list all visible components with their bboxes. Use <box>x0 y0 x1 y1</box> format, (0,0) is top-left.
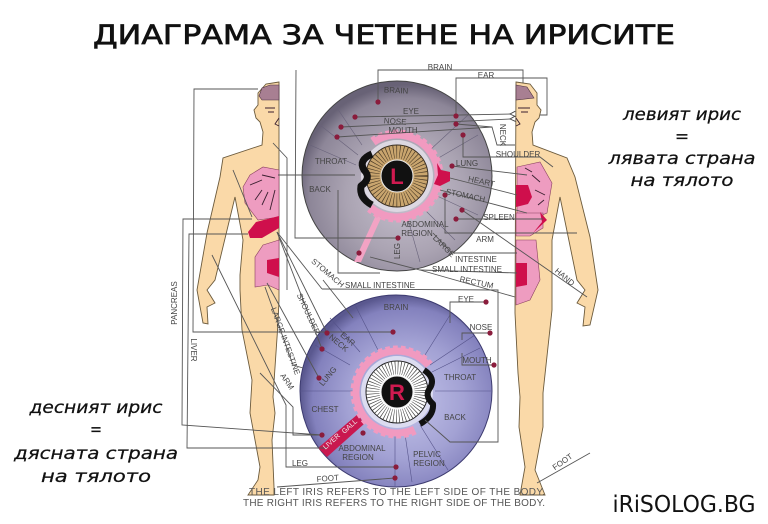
lower labels: SHOULDER <box>295 292 322 336</box>
lower labels: THROAT <box>444 373 476 382</box>
letter R: R <box>389 380 405 405</box>
upper labels: NECK <box>498 124 507 147</box>
callout: right iris <box>13 398 178 487</box>
lower labels: LARGE INTESTINE <box>269 306 302 376</box>
lower labels: REGION <box>413 459 445 468</box>
upper labels <box>309 63 576 291</box>
left lung <box>243 167 279 220</box>
black blob <box>420 370 433 424</box>
left intestines <box>255 240 279 290</box>
upper labels: EYE <box>403 107 419 116</box>
upper labels: ARM <box>476 235 494 244</box>
upper labels: LARGE <box>431 233 457 259</box>
upper labels: STOMACH <box>309 257 346 289</box>
callout: right iris: = <box>90 420 102 440</box>
upper labels: BRAIN <box>428 63 452 72</box>
right face <box>516 108 530 126</box>
connector lines <box>182 70 590 487</box>
lower labels: EYE <box>458 295 474 304</box>
callout: left iris: на тялото <box>630 171 734 191</box>
upper labels: BRAIN <box>384 85 409 96</box>
left small intestine <box>267 258 279 277</box>
upper labels: SHOULDER <box>496 150 540 159</box>
lower labels: NOSE <box>470 323 492 332</box>
lower labels: LEG <box>292 459 308 468</box>
right lung <box>517 162 552 220</box>
lower labels <box>170 281 574 484</box>
title: ДИАГРАМА ЗА ЧЕТЕНЕ НА ИРИСИТЕ <box>93 20 675 51</box>
upper labels: STOMACH <box>445 187 486 204</box>
lower labels: LIVER <box>322 433 342 451</box>
lower labels: FOOT <box>551 452 574 472</box>
upper iris <box>302 81 492 271</box>
right stomach <box>516 213 543 236</box>
upper labels: LUNG <box>456 159 478 168</box>
right spleen <box>533 212 547 233</box>
lower labels: ARM <box>278 372 296 392</box>
lower labels: FOOT <box>316 473 339 484</box>
right small intestine <box>516 263 527 287</box>
upper labels: INTESTINE <box>455 255 497 264</box>
right brain <box>516 85 534 100</box>
left brain <box>259 85 279 100</box>
red wedge <box>318 414 364 457</box>
lower labels: CHEST <box>311 405 339 414</box>
callout: right iris: десният ирис <box>28 398 163 418</box>
lower iris <box>300 295 492 487</box>
caption line 1: THE LEFT IRIS REFERS TO THE LEFT SIDE OF THE BODY. <box>249 487 545 498</box>
upper labels: SMALL INTESTINE <box>345 281 415 290</box>
caption line 2: THE RIGHT IRIS REFERS TO THE RIGHT SIDE OF THE BODY. <box>243 498 545 509</box>
brand: iRiSOLOG.BG <box>612 492 756 518</box>
lower labels: LIVER <box>189 338 198 362</box>
black blob <box>361 154 372 205</box>
upper labels: LEG <box>393 243 402 259</box>
callout: left iris: лявата страна <box>607 149 756 169</box>
upper labels: RECTUM <box>459 275 495 291</box>
upper labels: NOSE <box>384 116 407 127</box>
lower labels: GALL <box>341 418 359 435</box>
lower labels: BRAIN <box>384 303 408 312</box>
lower labels: PANCREAS <box>170 281 179 325</box>
lower labels: BACK <box>444 413 467 422</box>
marker dots <box>316 99 497 481</box>
left liver <box>248 216 279 238</box>
lower labels: ABDOMINAL <box>338 444 386 453</box>
upper labels: REGION <box>401 229 433 238</box>
upper labels: SPLEEN <box>483 213 515 222</box>
lower labels: LUNG <box>317 365 339 388</box>
lower labels: PELVIC <box>413 450 441 459</box>
right heart <box>516 185 532 207</box>
upper labels: EAR <box>478 71 494 80</box>
lower labels: REGION <box>342 453 374 462</box>
left pink wedge <box>354 215 381 262</box>
upper labels: HEART <box>467 174 496 189</box>
callout: left iris: = <box>675 127 689 147</box>
left face <box>265 108 279 126</box>
lower labels: NECK <box>327 332 351 354</box>
right body figure <box>515 82 598 495</box>
callout: right iris: на тялото <box>41 467 151 487</box>
heart spot <box>434 163 450 186</box>
letter L: L <box>390 164 404 189</box>
upper labels: MOUTH <box>388 126 418 135</box>
callout: left iris: левият ирис <box>622 105 742 125</box>
lower labels: MOUTH <box>462 356 492 365</box>
upper labels: SMALL INTESTINE <box>432 265 502 274</box>
upper labels: THROAT <box>315 157 347 166</box>
upper labels: ABDOMINAL <box>401 220 449 229</box>
left body figure <box>197 82 279 495</box>
upper labels: HAND <box>553 266 576 288</box>
right intestines <box>516 240 540 305</box>
upper labels: BACK <box>309 185 332 194</box>
lower labels: EAR <box>338 330 357 348</box>
callout: left iris <box>607 105 756 191</box>
callout: right iris: дясната страна <box>13 444 178 464</box>
